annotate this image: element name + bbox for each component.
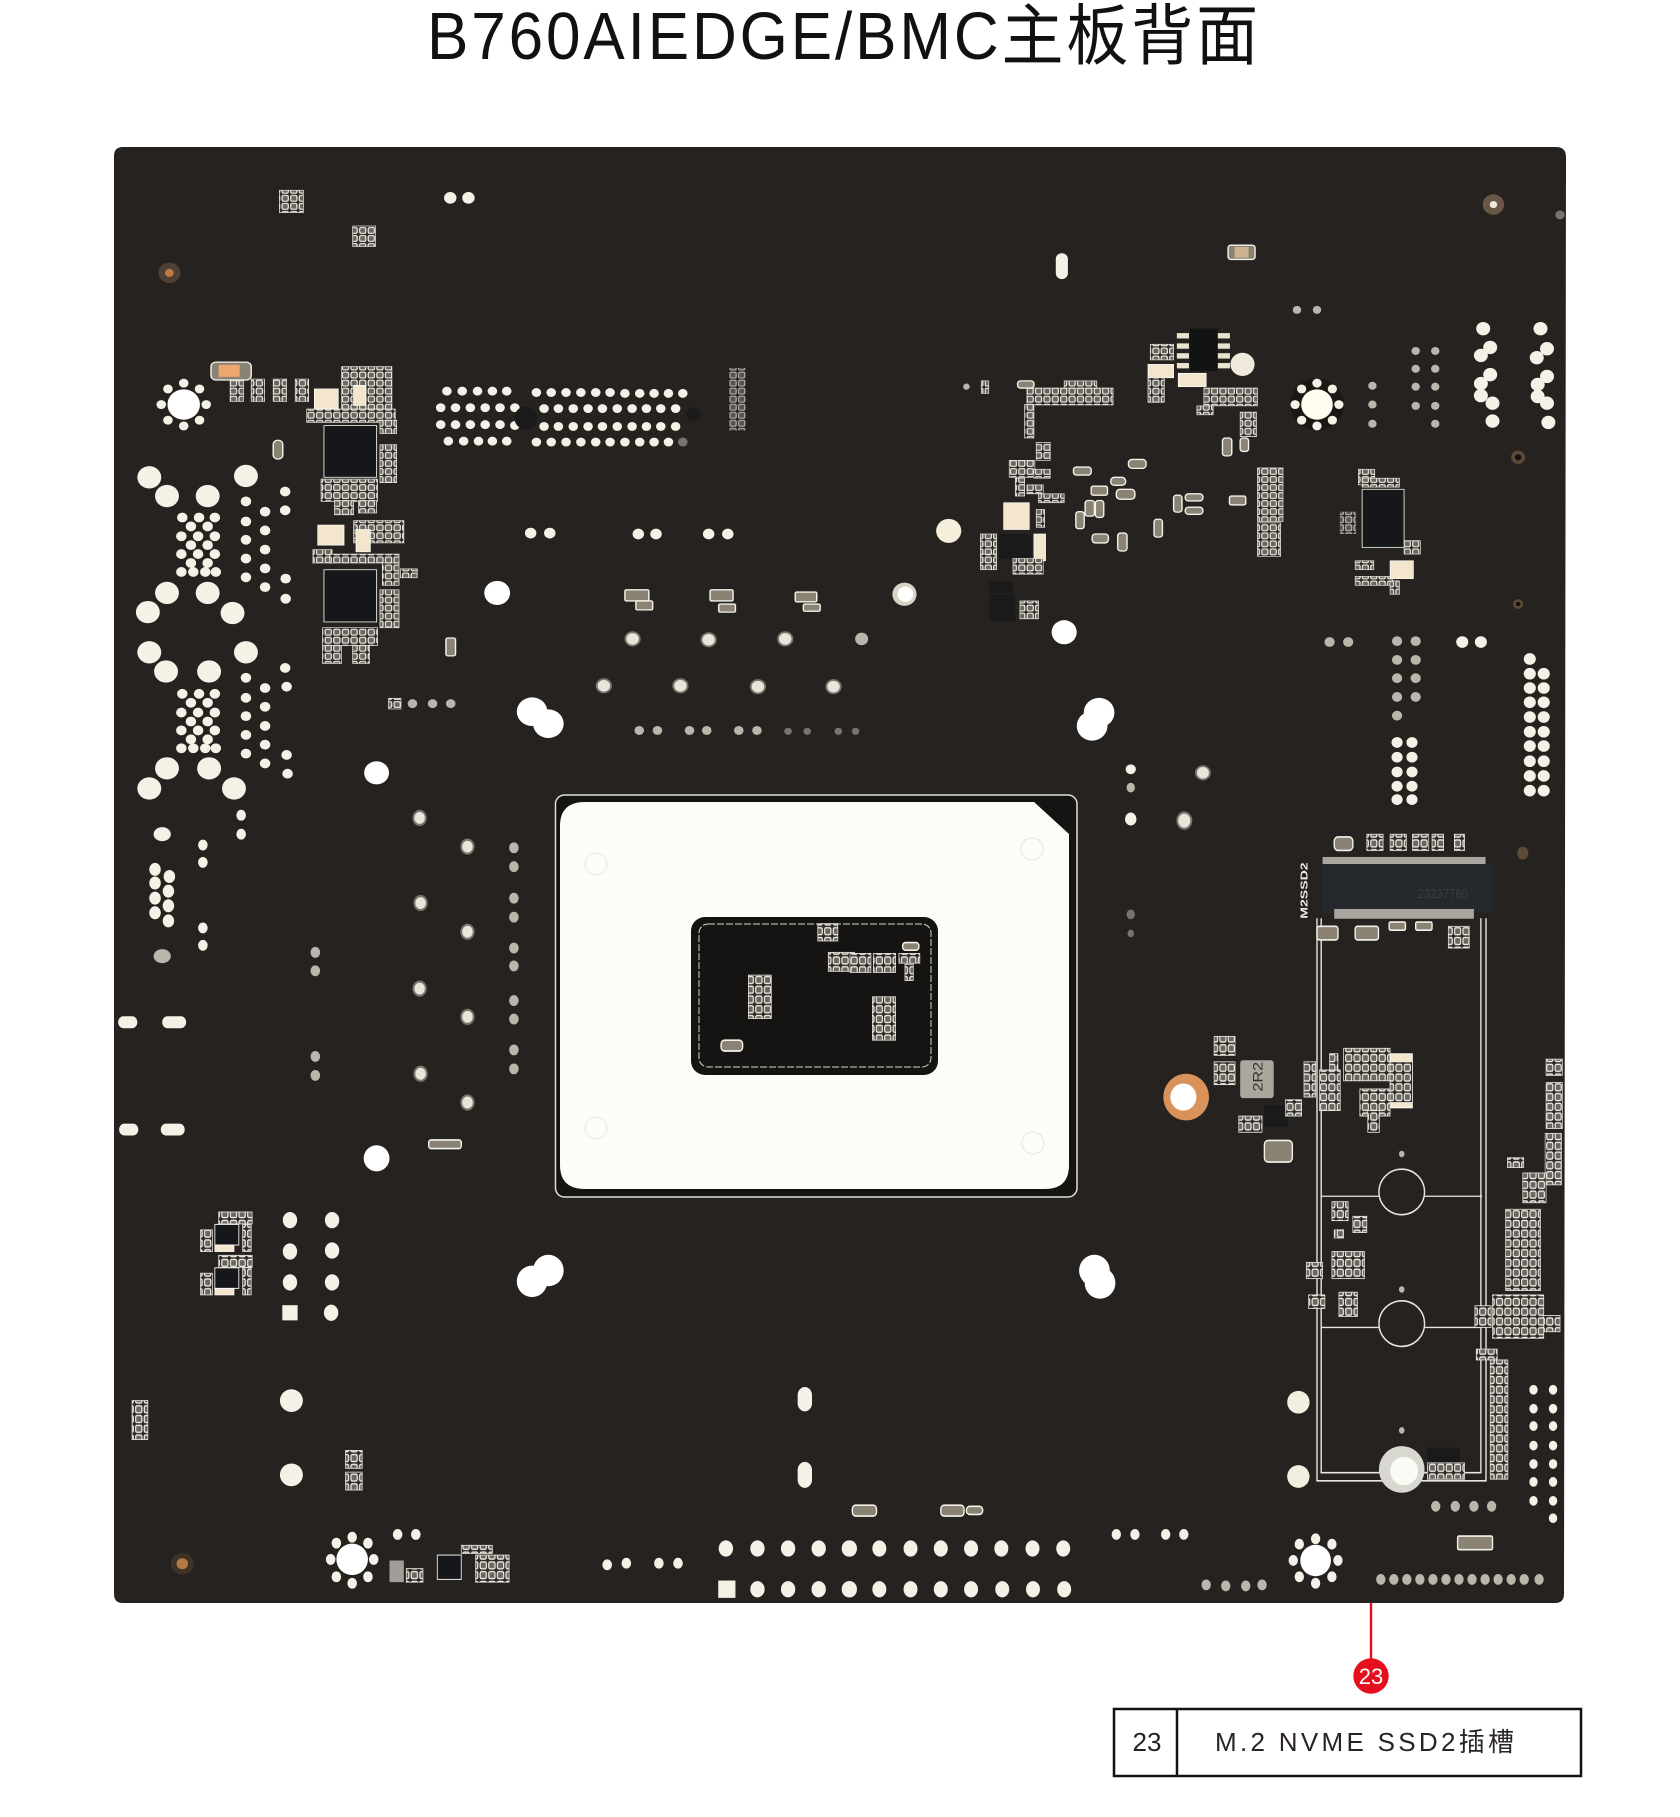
right edge resistor strips [1427,1059,1562,1479]
star mounting via [326,1532,378,1589]
copper mounting pad [171,1553,194,1575]
star mounting via [1289,1533,1343,1589]
bottom right via groups [1112,1385,1557,1591]
white backplate pad [560,802,1069,1189]
holes around cluster [892,519,1114,741]
parts in CPU window right [850,943,920,1040]
SOIC regulator cluster [1148,329,1257,456]
M.2 slot label: M2SSD2 [1299,862,1310,919]
small resistor and hole [364,1140,461,1171]
backplate recess outline [556,795,1077,1197]
lower via groups [852,633,1550,827]
white mounting holes [364,581,564,784]
corner mounting vias [1483,194,1565,219]
scattered small resistors [1073,459,1246,551]
left vias [149,810,320,1081]
top vias and pads [279,190,475,247]
LAN port solder group 2 [137,641,293,800]
header pin field [436,387,688,446]
passives under SSD area [1306,1202,1367,1317]
dual MOSFET cluster [200,1212,252,1295]
inductor 2R2 [1240,1060,1274,1098]
star mounting via [156,379,211,430]
resistor strip [1257,468,1283,556]
board region: upper right [852,194,1565,827]
SSD power passives [1214,1036,1412,1162]
title: B760AIEDGE/BMC主板背面 [427,0,1261,73]
flash IC cluster [1340,469,1420,594]
LAN port solder group 1 [136,465,291,624]
bottom via group [602,1558,683,1570]
table divider [1176,1709,1178,1776]
audio IC cluster [389,1529,509,1582]
backplate alignment circles [585,838,1044,1154]
misc small vias [1125,783,1528,1434]
brown vias [1511,451,1525,609]
bottom small resistors [852,1505,983,1516]
table frame [1114,1709,1581,1776]
board region: lower right [843,783,1562,1597]
CPU backplate area [556,795,1077,1197]
copper mounting ring [1163,1074,1209,1120]
board region: lower left [118,810,856,1598]
horizontal slots [118,1016,186,1136]
crystal and capacitors [211,362,309,401]
holes near M.2 [1079,1255,1310,1488]
small lozenge parts [273,440,456,656]
header dark vias [514,406,701,430]
inner window dashed outline [699,924,931,1067]
legend description: M.2 NVME SSD2插槽 [1215,1727,1517,1757]
parts in CPU window left [721,924,855,1051]
pads around connector [1317,834,1469,948]
inner black window [691,917,938,1075]
M.2 card outline [1317,918,1486,1493]
M.2 NVME SSD2 connector: 23237780 [1418,886,1468,901]
board region: upper left [136,190,842,800]
mounting holes [280,1255,812,1488]
callout line [1370,1603,1372,1662]
mounting pad: copper [158,263,180,283]
LAN controller chip 1 with passives [307,367,397,515]
vertical via staggered column [413,811,519,1110]
via rows [389,528,842,735]
small pad blocks [132,1401,362,1490]
callout badge 23: 23 [1359,1664,1383,1689]
panel: motherboard back view [114,147,1566,1603]
LAN controller chip 2 with passives [313,521,417,663]
PCIe solder rows left [718,1540,856,1598]
M.2 NVME SSD2 connector [1323,857,1493,919]
power control passive cluster [980,442,1064,621]
L-shaped passive row [963,381,1113,438]
small transistor pairs [625,590,820,612]
2x4 pin solder pads [282,1212,339,1321]
upper lozenge parts [1056,245,1321,314]
inductor 2R2: 2R2 [1251,1062,1266,1092]
star mounting via [1290,379,1344,430]
PCIe solder rows right [843,1540,1071,1597]
board substrate [114,147,1566,1603]
legend number: 23 [1133,1727,1161,1757]
callout badge 23 [1353,1658,1389,1694]
small connector strip [729,368,746,430]
legend table [1114,1709,1581,1776]
rear connector solder points [1368,322,1555,429]
